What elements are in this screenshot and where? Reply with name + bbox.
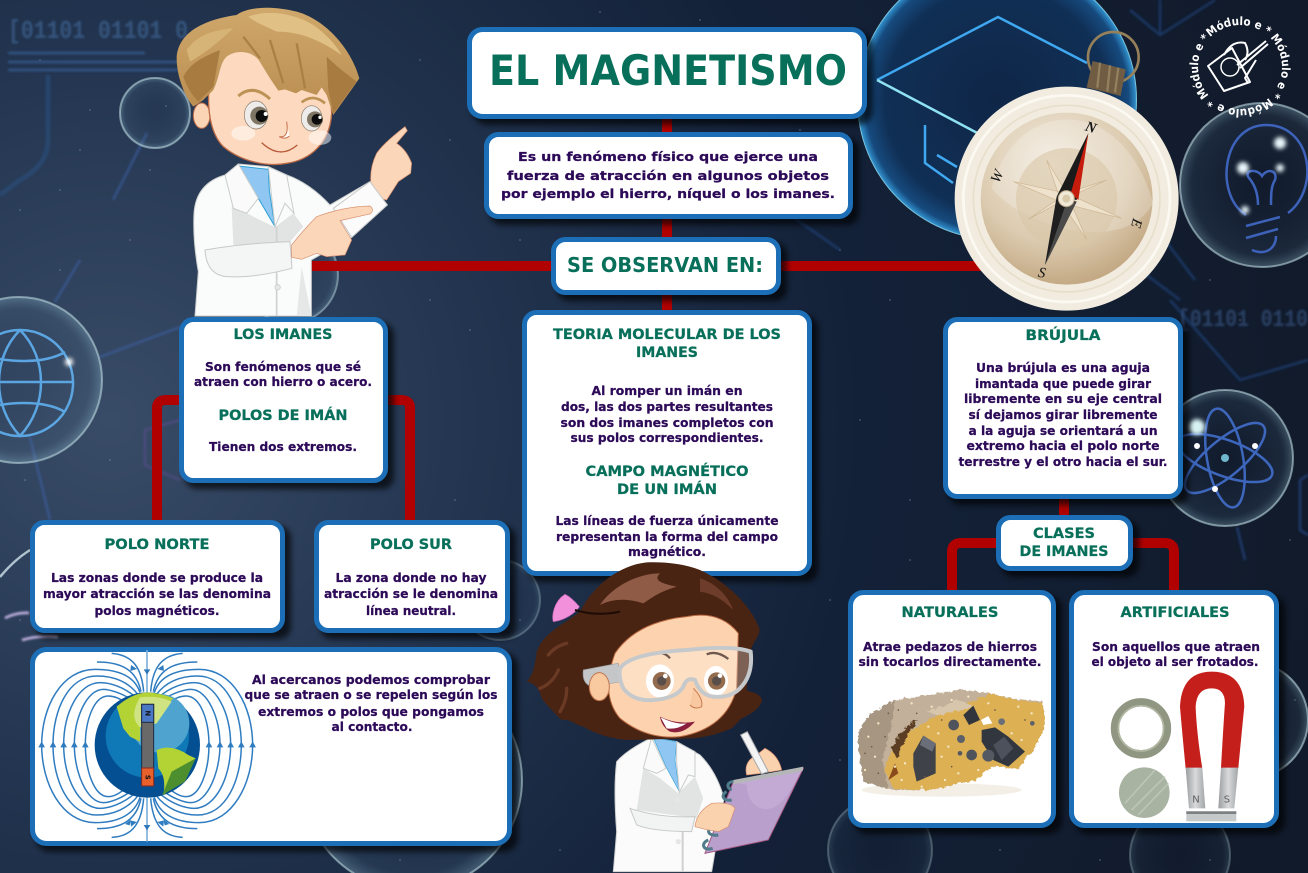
heading: se observan en: SE OBSERVAN EN: bbox=[567, 253, 763, 277]
text: field explanation: al contacto. bbox=[332, 720, 412, 734]
illustration: compass: E bbox=[1127, 216, 1145, 230]
panel: artificiales bbox=[1072, 592, 1285, 834]
panel: polo sur bbox=[316, 522, 516, 639]
illustration: girl scientist bbox=[527, 562, 803, 872]
panel: brujula: a la aguja se orientará a un bbox=[968, 424, 1158, 438]
title: EL MAGNETISMO bbox=[489, 46, 847, 95]
panel: naturales: Atrae pedazos de hierros bbox=[863, 640, 1037, 654]
panel: teoria molecular: TEORIA MOLECULAR DE LOS bbox=[553, 327, 781, 343]
panel: polo norte: polos magnéticos. bbox=[94, 604, 220, 618]
panel: definition: por ejemplo el hierro, níquel o los imanes. bbox=[501, 187, 835, 201]
diagram: earth with bar magnet and field lines: S bbox=[144, 775, 152, 780]
panel: brujula: imantada que puede girar bbox=[975, 377, 1151, 391]
logo: Módulo e: Módulo e * Módulo e * Módulo e * Módulo e * bbox=[1189, 16, 1291, 118]
text: field explanation: extremos o polos que pongamos bbox=[258, 705, 484, 719]
panel: los imanes: atraen con hierro o acero. bbox=[194, 375, 372, 389]
panel: teoria molecular: dos, las dos partes resultantes bbox=[561, 400, 773, 414]
panel: los imanes: LOS IMANES bbox=[234, 327, 332, 343]
panel: definition: fuerza de atracción en algunos objetos bbox=[507, 169, 829, 183]
panel: naturales bbox=[850, 592, 1062, 834]
title panel bbox=[470, 30, 873, 125]
panel: teoria molecular: DE UN IMÁN bbox=[617, 481, 717, 498]
panel: polo sur: atracción se le denomina bbox=[324, 587, 498, 601]
diagram: earth with bar magnet and field lines: N bbox=[144, 711, 152, 716]
heading: clases de imanes bbox=[998, 518, 1139, 577]
panel: definition bbox=[486, 134, 859, 225]
panel: brujula: libremente en su eje central bbox=[964, 392, 1162, 406]
panel: brujula: BRÚJULA bbox=[1026, 326, 1101, 344]
panel: teoria molecular: IMANES bbox=[636, 345, 698, 361]
panel: polo norte: mayor atracción se las denomina bbox=[43, 587, 271, 601]
image: ring disc and horseshoe magnet: S bbox=[1224, 795, 1230, 806]
diagram: earth with bar magnet and field lines bbox=[38, 650, 256, 842]
panel: polo sur: La zona donde no hay bbox=[336, 571, 487, 585]
illustration: compass: S bbox=[1037, 265, 1048, 282]
panel: teoria molecular: magnético. bbox=[628, 545, 706, 559]
image: magnetite rock bbox=[858, 689, 1045, 797]
panel: brujula bbox=[946, 320, 1189, 505]
illustration: compass bbox=[955, 32, 1179, 311]
text: field explanation: que se atraen o se repelen según los bbox=[244, 688, 498, 702]
illustration: compass: W bbox=[988, 166, 1008, 186]
text: field explanation: Al acercanos podemos comprobar bbox=[252, 673, 490, 687]
panel: definition: Es un fenómeno físico que ejerce una bbox=[518, 150, 818, 164]
panel: polo sur: línea neutral. bbox=[366, 604, 456, 618]
panel: los imanes: Tienen dos extremos. bbox=[209, 440, 357, 454]
heading: se observan en bbox=[554, 240, 787, 301]
panel: brujula: Una brújula es una aguja bbox=[976, 361, 1150, 375]
image: ring disc and horseshoe magnet bbox=[1115, 672, 1244, 821]
panel: teoria molecular: Al romper un imán en bbox=[592, 384, 742, 398]
panel: polo norte: POLO NORTE bbox=[104, 537, 210, 553]
illustration: compass: N bbox=[1082, 118, 1099, 138]
text: field explanation bbox=[244, 673, 498, 734]
panel: earth magnetic field bbox=[32, 650, 518, 852]
panel: los imanes: POLOS DE IMÁN bbox=[218, 407, 348, 424]
panel: brujula: terrestre y el otro hacia el sur. bbox=[958, 455, 1168, 469]
panel: naturales: sin tocarlos directamente. bbox=[858, 655, 1042, 669]
background: [01101 01101 0 bbox=[8, 16, 188, 46]
panel: brujula: extremo hacia el polo norte bbox=[966, 439, 1160, 453]
heading: clases de imanes: DE IMANES bbox=[1020, 544, 1108, 560]
panel: artificiales: el objeto al ser frotados. bbox=[1092, 655, 1258, 669]
panel: teoria molecular bbox=[524, 312, 818, 582]
panel: artificiales: Son aquellos que atraen bbox=[1092, 640, 1260, 654]
panel: teoria molecular: representan la forma del campo bbox=[556, 530, 778, 544]
panel: naturales: NATURALES bbox=[902, 605, 998, 621]
panel: polo norte bbox=[32, 522, 291, 639]
illustration: boy scientist bbox=[177, 8, 412, 316]
image: ring disc and horseshoe magnet: N bbox=[1192, 795, 1200, 806]
heading: clases de imanes: CLASES bbox=[1033, 526, 1095, 542]
panel: teoria molecular: son dos imanes completos con bbox=[560, 416, 774, 430]
panel: teoria molecular: sus polos correspondientes. bbox=[570, 431, 764, 445]
panel: polo norte: Las zonas donde se produce la bbox=[51, 571, 263, 585]
panel: los imanes: Son fenómenos que sé bbox=[205, 360, 361, 374]
panel: brujula: sí dejamos girar libremente bbox=[968, 408, 1158, 422]
panel: artificiales: ARTIFICIALES bbox=[1120, 605, 1230, 621]
panel: teoria molecular: CAMPO MAGNÉTICO bbox=[586, 463, 749, 480]
panel: teoria molecular: Las líneas de fuerza únicamente bbox=[556, 514, 778, 528]
connectors bbox=[157, 110, 1174, 595]
panel: los imanes bbox=[182, 320, 394, 489]
panel: polo sur: POLO SUR bbox=[370, 537, 452, 553]
